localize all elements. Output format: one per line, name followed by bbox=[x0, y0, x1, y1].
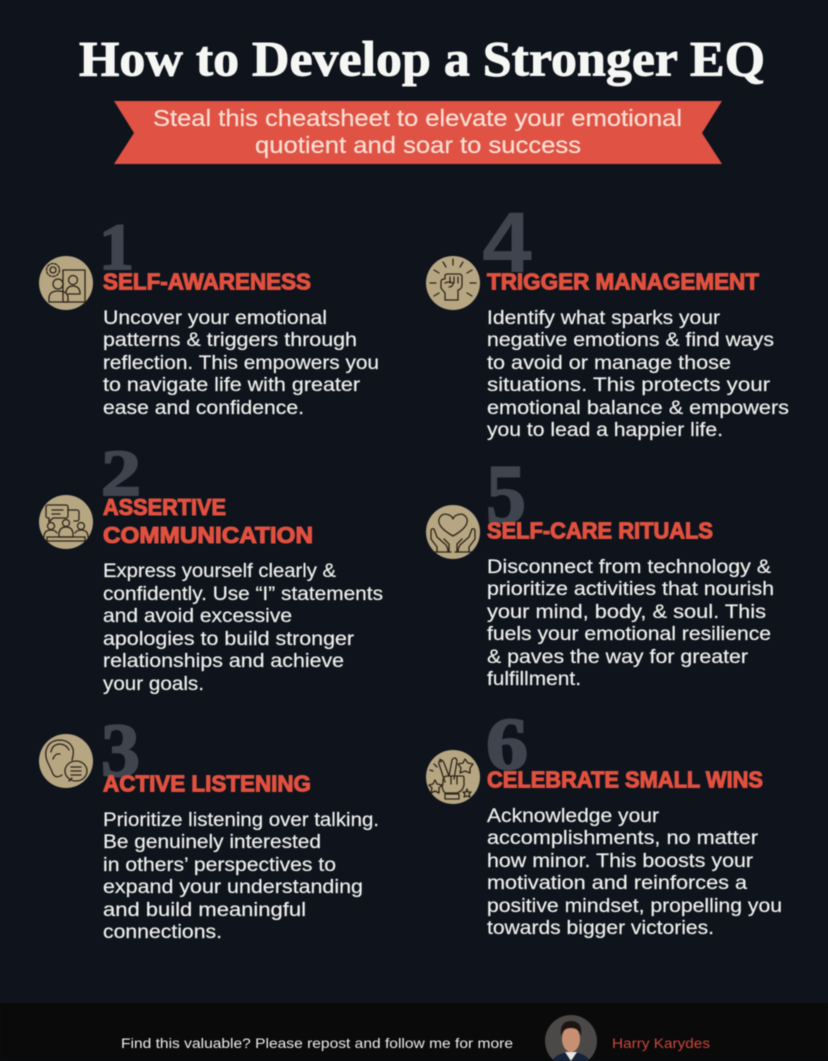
body text: expand your understanding bbox=[103, 877, 363, 898]
body text: you to lead a happier life. bbox=[487, 420, 723, 441]
icon: raised fist with rays bbox=[426, 256, 480, 310]
heading: ACTIVE LISTENING bbox=[103, 770, 311, 796]
banner: subtitle ribbon: Steal this cheatsheet to elevate your emotional bbox=[153, 105, 682, 131]
number 2: 2 bbox=[101, 437, 141, 510]
heading bbox=[103, 494, 313, 548]
body text bbox=[103, 810, 379, 943]
body text bbox=[487, 557, 774, 690]
body text: patterns & triggers through bbox=[103, 330, 357, 351]
body text: Prioritize listening over talking. bbox=[103, 810, 379, 831]
body text: reflection. This empowers you bbox=[103, 353, 379, 374]
body text: your mind, body, & soul. This bbox=[487, 602, 766, 623]
heading: TRIGGER MANAGEMENT bbox=[487, 268, 759, 294]
body text bbox=[103, 561, 383, 695]
icon: ear with speech bubble bbox=[39, 734, 93, 788]
body text bbox=[487, 308, 789, 441]
body text: connections. bbox=[103, 922, 222, 943]
body text: Acknowledge your bbox=[487, 806, 660, 827]
icon: group conversation bbox=[39, 495, 93, 549]
body text: to avoid or manage those bbox=[487, 353, 731, 374]
body text: and avoid excessive bbox=[103, 606, 292, 627]
number 3: 3 bbox=[101, 709, 140, 793]
heading: SELF-AWARENESS bbox=[103, 268, 311, 294]
icon: person reflected in mirror with gear bbox=[39, 256, 93, 310]
body text: Be genuinely interested bbox=[103, 832, 321, 853]
author name: Harry Karydes bbox=[612, 1035, 710, 1051]
icon: victory hand with stars bbox=[426, 750, 480, 804]
icon: hands holding heart bbox=[426, 505, 480, 559]
banner: subtitle ribbon: quotient and soar to success bbox=[255, 132, 581, 158]
body text: how minor. This boosts your bbox=[487, 851, 754, 872]
banner: subtitle ribbon bbox=[114, 101, 722, 164]
panel: 3 active listening bbox=[39, 709, 379, 943]
body text: Disconnect from technology & bbox=[487, 557, 771, 578]
panel: 2 assertive communication bbox=[39, 437, 383, 695]
body text: fulfillment. bbox=[487, 669, 581, 690]
body text: apologies to build stronger bbox=[103, 629, 355, 650]
footer call to action: Find this valuable? Please repost and follow me for more bbox=[121, 1035, 513, 1051]
body text: accomplishments, no matter bbox=[487, 828, 759, 849]
body text: and build meaningful bbox=[103, 900, 306, 921]
footer bar bbox=[0, 1003, 828, 1061]
body text: Uncover your emotional bbox=[103, 308, 327, 329]
number 5: 5 bbox=[486, 448, 526, 541]
body text: negative emotions & find ways bbox=[487, 330, 774, 351]
body text bbox=[487, 806, 782, 939]
number 1: 1 bbox=[99, 211, 134, 284]
body text: motivation and reinforces a bbox=[487, 873, 747, 894]
body text: towards bigger victories. bbox=[487, 918, 714, 939]
body text: positive mindset, propelling you bbox=[487, 896, 782, 917]
body text: ease and confidence. bbox=[103, 398, 304, 419]
body text: emotional balance & empowers bbox=[487, 398, 789, 419]
panel: 4 trigger management bbox=[426, 195, 789, 441]
number 6: 6 bbox=[486, 704, 528, 786]
body text: fuels your emotional resilience bbox=[487, 624, 771, 645]
panel: 1 self-awareness bbox=[39, 211, 379, 419]
body text: Identify what sparks your bbox=[487, 308, 721, 329]
body text: to navigate life with greater bbox=[103, 375, 361, 396]
panel: 5 self-care rituals bbox=[426, 448, 774, 690]
heading: ASSERTIVE bbox=[103, 494, 226, 520]
body text: relationships and achieve bbox=[103, 651, 344, 672]
body text: & paves the way for greater bbox=[487, 647, 749, 668]
body text: Express yourself clearly & bbox=[103, 561, 336, 582]
body text: prioritize activities that nourish bbox=[487, 579, 774, 600]
body text: in others’ perspectives to bbox=[103, 855, 336, 876]
author portrait bbox=[544, 1014, 598, 1061]
body text: confidently. Use “I” statements bbox=[103, 584, 383, 605]
heading: COMMUNICATION bbox=[103, 522, 313, 548]
body text: situations. This protects your bbox=[487, 375, 771, 396]
heading: CELEBRATE SMALL WINS bbox=[487, 766, 763, 792]
heading: SELF-CARE RITUALS bbox=[487, 518, 713, 544]
body text: your goals. bbox=[103, 674, 204, 695]
body text bbox=[103, 308, 379, 419]
panel: 6 celebrate small wins bbox=[426, 704, 782, 939]
number 4: 4 bbox=[482, 195, 532, 291]
title: How to Develop a Stronger EQ bbox=[79, 30, 765, 86]
